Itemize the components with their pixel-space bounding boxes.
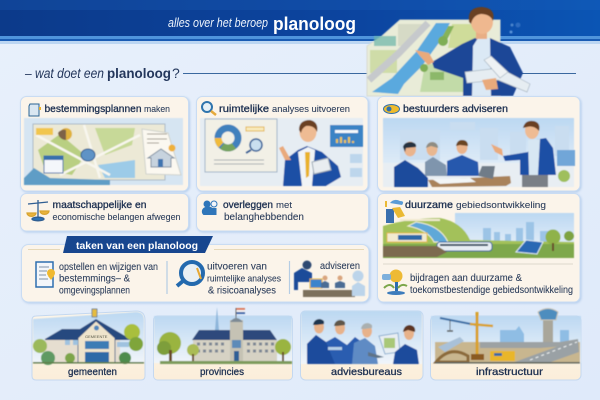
panel: bestuurders adviseren: bestuurders adviseren bbox=[403, 103, 508, 115]
panel: belangen afwegen: maatschappelijke en bbox=[52, 200, 146, 211]
panel: duurzame gebiedsontwikkeling: duurzame bbox=[405, 200, 453, 211]
panel: infrastructuur: infrastructuur bbox=[476, 366, 544, 378]
illustration: town hall bbox=[33, 309, 144, 365]
meeting illustration bbox=[383, 118, 575, 187]
panel: adviesbureaus: adviesbureaus bbox=[331, 366, 402, 378]
heading: wat doet een planoloog: – wat doet een bbox=[24, 66, 104, 81]
landscape illustration bbox=[383, 213, 574, 258]
icon: people bbox=[202, 200, 217, 215]
illustration: provincial building bbox=[154, 307, 292, 364]
panel: overleggen met belanghebbenden: overleggen bbox=[223, 200, 273, 211]
title bbox=[168, 14, 356, 34]
panel: adviesbureaus bbox=[300, 311, 423, 380]
panel: duurzame gebiedsontwikkeling: gebiedsontwikkeling bbox=[456, 200, 546, 211]
heading: wat doet een planoloog: planoloog bbox=[107, 65, 171, 81]
map illustration bbox=[24, 118, 183, 185]
panel: gemeenten: gemeenten bbox=[68, 366, 117, 378]
panel: belangen afwegen bbox=[20, 194, 188, 231]
panel: overleggen met belanghebbenden: belanghebbenden bbox=[224, 212, 304, 223]
illustration: crane and highway bbox=[431, 308, 581, 364]
analysis illustration bbox=[200, 118, 363, 186]
title: planoloog bbox=[273, 14, 356, 34]
title: alles over het beroep bbox=[168, 15, 268, 30]
icon: magnifier bbox=[202, 102, 216, 115]
header banner bbox=[0, 0, 600, 44]
label: GEMEENTE sign: GEMEENTE bbox=[85, 334, 108, 339]
panel: duurzame gebiedsontwikkeling: toekomstbestendige gebiedsontwikkeling bbox=[410, 285, 573, 296]
panel: bestuurders adviseren bbox=[378, 96, 580, 191]
panel: duurzame gebiedsontwikkeling bbox=[378, 194, 580, 302]
panel: provincies bbox=[154, 307, 292, 380]
text: opstellen en wijzigen: omgevingsplannen bbox=[59, 286, 130, 296]
panel: ruimtelijke analyses uitvoeren: analyses uitvoeren bbox=[272, 104, 350, 115]
text: opstellen en wijzigen bbox=[59, 262, 158, 296]
panel: bestemmingsplannen maken: maken bbox=[144, 104, 170, 114]
text: uitvoeren van bbox=[207, 262, 281, 296]
text: uitvoeren van: & risicoanalyses bbox=[208, 286, 276, 296]
icon: advisory scene bbox=[294, 260, 365, 297]
panel: overleggen met belanghebbenden bbox=[196, 194, 368, 231]
icon: scales bbox=[27, 200, 49, 221]
panel: infrastructuur bbox=[430, 308, 581, 380]
icon: eye bbox=[384, 104, 400, 114]
illustration: planner with map bbox=[367, 7, 530, 96]
icon: document bbox=[29, 104, 41, 116]
panel: gemeenten bbox=[32, 309, 145, 380]
panel: bestemmingsplannen maken: bestemmingsplannen bbox=[44, 104, 142, 115]
text: opstellen en wijzigen: opstellen en wijzigen van bbox=[59, 262, 158, 273]
icon: magnifier bbox=[177, 262, 203, 286]
icon: city and cloud bbox=[385, 200, 405, 223]
tag: taken van een planoloog bbox=[63, 236, 213, 253]
panel: overleggen met belanghebbenden: met bbox=[276, 200, 292, 211]
text: opstellen en wijzigen: bestemmings– & bbox=[59, 274, 130, 284]
icon: light bulb bbox=[382, 270, 407, 295]
tag: taken van een planoloog: taken van een planoloog bbox=[76, 240, 198, 252]
panel: bestemmingsplannen maken bbox=[20, 96, 188, 191]
icon: document with pin bbox=[36, 262, 55, 287]
panel: taken van een planoloog bbox=[22, 236, 369, 302]
panel: belangen afwegen: economische belangen afwegen bbox=[52, 212, 180, 223]
text: uitvoeren van: ruimtelijke analyses bbox=[207, 274, 281, 284]
panel: ruimtelijke analyses uitvoeren bbox=[196, 96, 368, 191]
text: adviseren: adviseren bbox=[320, 261, 360, 272]
text: uitvoeren van: uitvoeren van bbox=[207, 262, 267, 272]
heading: wat doet een planoloog: ? bbox=[172, 65, 180, 81]
illustration: consultants bbox=[301, 311, 422, 364]
heading: wat doet een planoloog bbox=[24, 65, 576, 81]
panel: provincies: provincies bbox=[200, 366, 244, 378]
panel: ruimtelijke analyses uitvoeren: ruimtelijke bbox=[219, 104, 269, 115]
panel: duurzame gebiedsontwikkeling: bijdragen aan duurzame & bbox=[410, 273, 522, 284]
